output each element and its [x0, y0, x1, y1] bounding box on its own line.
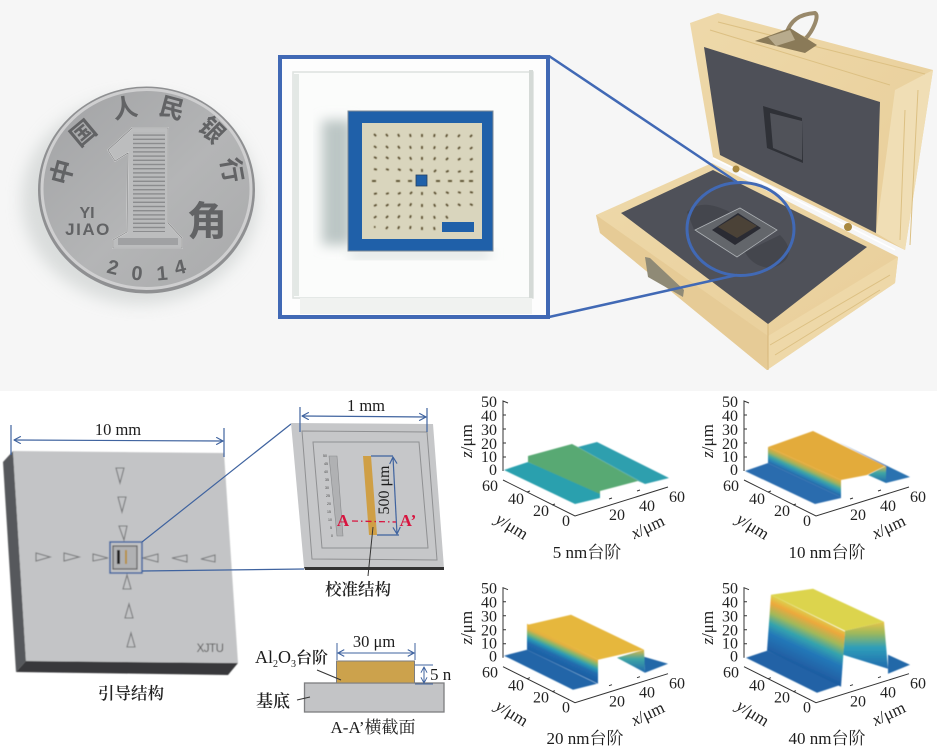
photo: one-jiao coin: [22, 86, 258, 304]
axes: 50: [722, 394, 738, 411]
surface: [746, 589, 910, 693]
axes: 0: [803, 513, 811, 530]
chart: 5 nm step: [457, 394, 685, 562]
axes: 60: [910, 489, 926, 506]
axes: 10: [481, 449, 497, 466]
label: substrate: [256, 692, 310, 711]
axes: 40: [749, 678, 765, 695]
ruler scale: 20: [327, 502, 331, 506]
dimension: 30 um: [337, 632, 415, 660]
axes: 20: [481, 436, 497, 453]
axes: 40: [508, 491, 524, 508]
glass slide: [293, 70, 533, 314]
axes: z/μm: [698, 424, 717, 459]
axes: 20: [533, 690, 549, 707]
coin lettering: 角: [187, 200, 227, 244]
coin lettering: 民: [156, 92, 187, 126]
axes: z/μm: [698, 611, 717, 646]
caption: cross section: A-A’横截面: [330, 718, 416, 737]
axes: [698, 581, 926, 730]
axes: 20: [774, 690, 790, 707]
foam recess: [687, 205, 789, 268]
ruler scale: 45: [324, 462, 328, 466]
coin lettering: 人: [110, 93, 140, 125]
axes: x/μm: [627, 511, 667, 543]
pointer: [368, 527, 373, 576]
coin lettering: JIAO: [65, 220, 111, 239]
coin lettering: [46, 92, 247, 285]
surface: [504, 615, 668, 690]
ruler scale: 15: [327, 510, 331, 514]
box latch: [755, 13, 817, 53]
glass slide in box: [695, 208, 777, 257]
axes: 60: [482, 665, 498, 682]
axes: y/μm: [491, 695, 532, 730]
axes: 60: [723, 665, 739, 682]
axes: 60: [669, 489, 685, 506]
axes: 20: [774, 503, 790, 520]
coin lettering: 4: [172, 256, 189, 280]
axes: y/μm: [732, 508, 773, 544]
axes: 60: [723, 478, 739, 495]
chart: 10 nm step: [698, 394, 926, 562]
axes: 40: [481, 408, 497, 425]
axes: 20: [481, 623, 497, 640]
axes: 20: [850, 694, 866, 711]
axes: 50: [722, 581, 738, 598]
caption: calibration structure: 校准结构: [325, 579, 391, 599]
section line A-A': A: [337, 511, 350, 530]
gold step bar: [363, 456, 377, 535]
surface: [504, 442, 669, 504]
axes: 30: [722, 609, 738, 626]
axes: y/μm: [491, 508, 532, 544]
label: Al2O3 step: 台阶: [296, 649, 328, 667]
axes: 0: [562, 700, 570, 717]
axes: 40: [880, 685, 896, 702]
chart: 20 nm step: [457, 581, 685, 748]
axes: 40: [722, 408, 738, 425]
central calibration square: [110, 542, 142, 573]
axes: 50: [481, 394, 497, 411]
coin lettering: 国: [65, 115, 102, 153]
dimension: 5 nm: [415, 665, 452, 684]
section line A-A': [337, 511, 416, 530]
coin lettering: 1: [156, 263, 169, 285]
axes: z/μm: [457, 424, 476, 459]
axes: 40: [639, 498, 655, 515]
axes: 40: [880, 498, 896, 515]
dimension: 1 mm: 1 mm: [347, 396, 385, 415]
zoom callout lines and circle: [280, 56, 794, 317]
dimension: 500 um: [371, 456, 399, 535]
axes: x/μm: [868, 511, 908, 543]
label: Al2O3 step: 2: [273, 659, 278, 670]
ruler scale: 10: [328, 518, 332, 522]
axes: 40: [722, 595, 738, 612]
axes: 60: [910, 676, 926, 693]
chip: [348, 111, 493, 251]
axes: 20: [850, 507, 866, 524]
axes: x/μm: [627, 698, 667, 730]
axes: 60: [669, 676, 685, 693]
box base: [596, 158, 898, 370]
axes: 0: [730, 649, 738, 666]
calibration structure plate: [291, 423, 444, 576]
caption: guide structure: 引导结构: [98, 683, 164, 703]
XJTU mark: XJTU: [197, 643, 224, 655]
ruler scale: 35: [325, 478, 329, 482]
surface: [745, 431, 910, 504]
dimension: 5 nm: 5 n: [430, 665, 452, 684]
axes: 0: [562, 513, 570, 530]
guide structure plate: [3, 451, 238, 675]
coin lettering: 2: [105, 256, 121, 280]
box lid: [690, 13, 933, 250]
axes: 40: [749, 491, 765, 508]
axes: 50: [481, 581, 497, 598]
axes: 0: [730, 462, 738, 479]
axes: 10: [481, 636, 497, 653]
axes: 0: [489, 649, 497, 666]
ruler scale: 0: [331, 534, 333, 538]
axes: 30: [481, 422, 497, 439]
ruler scale: 40: [324, 470, 328, 474]
label: Al2O3 step: 3: [291, 659, 296, 670]
coin lettering: 银: [193, 112, 230, 149]
label: Al2O3 step: [255, 647, 341, 680]
coin lettering: 行: [215, 155, 247, 185]
chart: 40 nm step: [698, 581, 926, 748]
photo: wooden box: [596, 13, 933, 370]
dimension: 10 mm: [11, 420, 224, 457]
caption: 40 nm台阶: [789, 729, 865, 748]
axes: 0: [489, 462, 497, 479]
ruler scale: 50: [323, 454, 327, 458]
photo background: [0, 0, 937, 391]
caption: 20 nm台阶: [547, 729, 623, 748]
section line A-A': A’: [400, 511, 416, 530]
axes: x/μm: [868, 698, 908, 730]
label: Al2O3 step: O: [278, 647, 291, 667]
axes: [457, 581, 685, 730]
axes: [698, 394, 926, 544]
axes: 60: [482, 478, 498, 495]
caption: 5 nm台阶: [553, 543, 621, 562]
axes: 0: [803, 700, 811, 717]
ruler scale: [323, 454, 343, 538]
axes: 30: [722, 422, 738, 439]
ruler scale: 25: [326, 494, 330, 498]
dimension: 500 um: 500 μm: [376, 465, 393, 515]
coin lettering: 中: [46, 157, 80, 188]
axes: z/μm: [457, 611, 476, 646]
axes: 20: [533, 503, 549, 520]
coin lettering: YI: [79, 205, 95, 222]
axes: [457, 394, 685, 544]
guide triangles: [36, 468, 215, 647]
axes: 10: [722, 636, 738, 653]
caption: 10 nm台阶: [789, 543, 865, 562]
ruler scale: 30: [325, 486, 329, 490]
axes: 20: [609, 507, 625, 524]
axes: 10: [722, 449, 738, 466]
photo: chip in glass, blue frame: [280, 57, 548, 316]
axes: 20: [609, 694, 625, 711]
dimension: 1 mm: [300, 396, 427, 432]
label: Al2O3 step: Al: [255, 647, 273, 667]
label: substrate: 基底: [256, 692, 290, 711]
ruler scale: 5: [330, 526, 332, 530]
axes: 40: [508, 678, 524, 695]
front clasp: [645, 257, 684, 297]
axes: 20: [722, 623, 738, 640]
dimension: 10 mm: 10 mm: [95, 420, 141, 439]
axes: 40: [481, 595, 497, 612]
coin lettering: 0: [130, 263, 143, 285]
axes: y/μm: [732, 695, 773, 730]
coin numeral 1: [108, 128, 182, 248]
cross-section diagram: [255, 632, 452, 712]
axes: 20: [722, 436, 738, 453]
axes: 30: [481, 609, 497, 626]
axes: 40: [639, 685, 655, 702]
zoom connector lines: [142, 424, 304, 571]
dimension: 30 um: 30 μm: [353, 632, 395, 651]
chip in box: [712, 213, 761, 245]
